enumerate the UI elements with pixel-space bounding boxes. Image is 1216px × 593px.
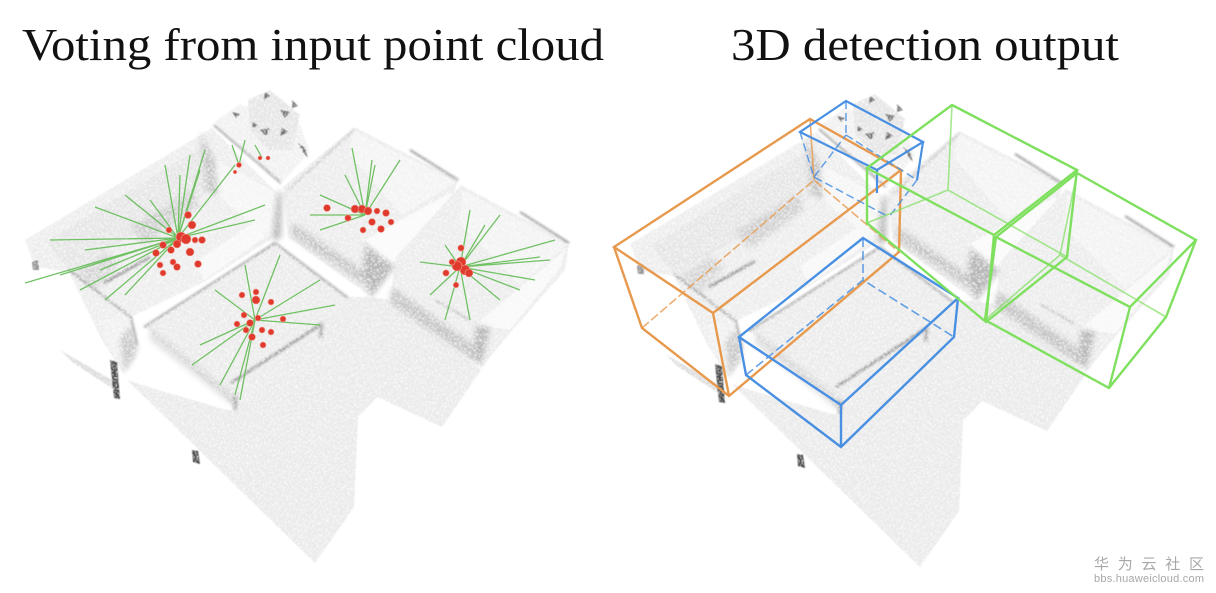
box: green armchair two xyxy=(985,173,1196,388)
box: blue plant table xyxy=(800,101,923,217)
box: green armchair one xyxy=(867,105,1077,322)
panel: input point cloud scene with votes xyxy=(25,90,569,563)
watermark: huawei cloud community: bbs.huaweicloud.com xyxy=(1094,573,1204,585)
votes: green lines xyxy=(25,140,555,400)
box: blue coffee table xyxy=(739,238,958,447)
box: orange sofa xyxy=(614,119,901,396)
point cloud: living room right xyxy=(630,94,1174,567)
votes: red points xyxy=(152,156,473,348)
title: voting from input point cloud: Voting from input point cloud xyxy=(22,19,604,70)
watermark: huawei cloud community xyxy=(1094,556,1204,585)
watermark: huawei cloud community: 华 为 云 社 区 xyxy=(1094,556,1204,573)
panel: 3D detection output scene with boxes xyxy=(614,94,1196,567)
title: 3D detection output: 3D detection output xyxy=(731,19,1119,70)
point cloud: living room left xyxy=(25,90,569,563)
